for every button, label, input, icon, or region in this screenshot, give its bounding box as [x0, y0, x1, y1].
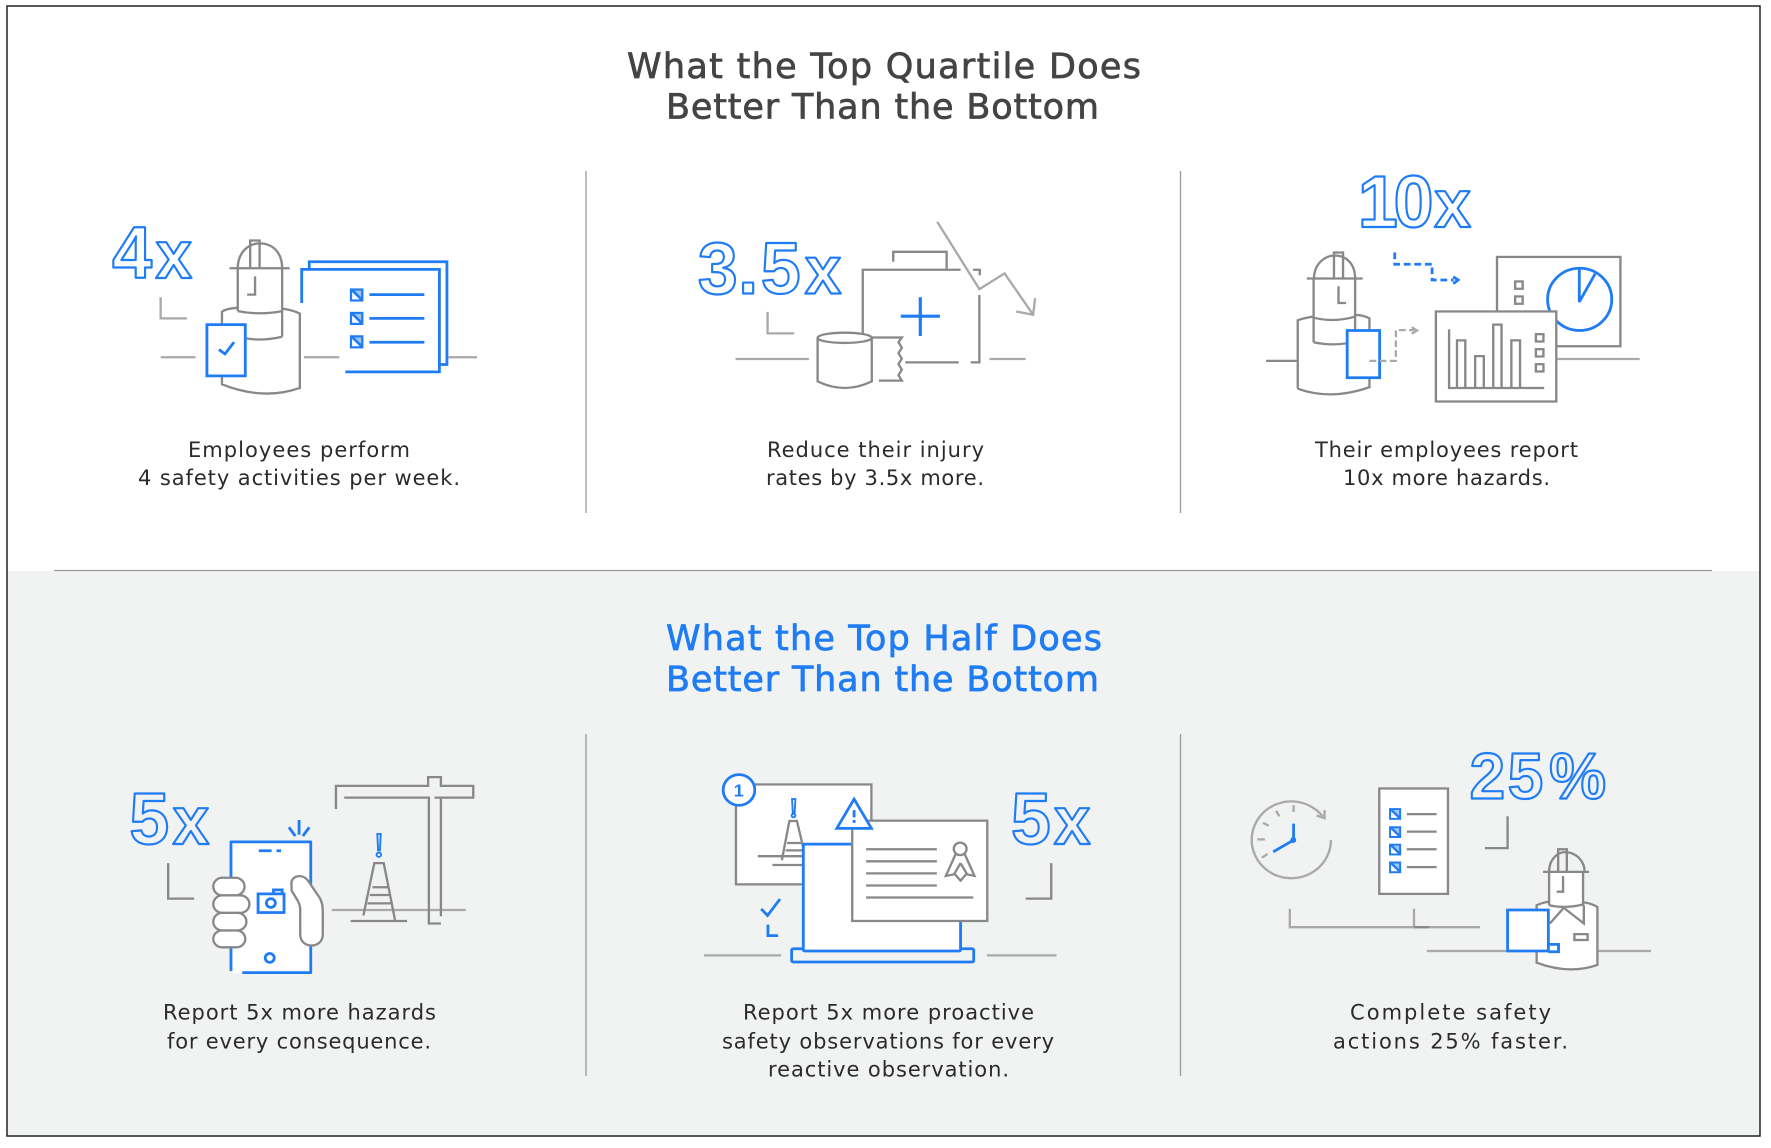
caption [1314, 438, 1578, 490]
stat: 5x: x [1054, 784, 1090, 859]
icon: clock [1252, 801, 1331, 878]
icon: traffic cone [351, 834, 407, 921]
stat: 4x: x [155, 218, 192, 293]
caption: reactive observation. [768, 1058, 1009, 1082]
illustration: laptop with certificate and hazard report [704, 775, 1090, 962]
stat: 4x: 4 [112, 213, 152, 294]
heading: top half [666, 619, 1102, 700]
panel: 4x safety activities [112, 213, 477, 490]
heading: top half: What the Top Half Does [666, 619, 1102, 659]
icon: checklist [1379, 788, 1448, 894]
icon: phone in hand [213, 820, 323, 973]
heading: top quartile: What the Top Quartile Does [627, 47, 1141, 87]
icon: check [761, 899, 780, 936]
icon: laptop [792, 844, 974, 962]
illustration: worker with checklist [112, 213, 477, 394]
stat: 5x: 5 [129, 779, 169, 860]
illustration: clock, checklist and worker [1252, 740, 1651, 969]
caption [766, 438, 984, 490]
icon: pie chart screen [1497, 257, 1620, 346]
panel: 25% faster [1252, 740, 1651, 1054]
panel: 3.5x injury rates [698, 222, 1035, 490]
heading: top quartile [627, 47, 1141, 128]
icon: worker with tablet [1508, 849, 1597, 969]
caption: safety observations for every [722, 1030, 1054, 1054]
caption: rates by 3.5x more. [766, 466, 984, 490]
icon: hazard screen: 1 [734, 781, 744, 800]
caption: Employees perform [188, 438, 410, 462]
caption: 4 safety activities per week. [138, 466, 460, 490]
caption [138, 438, 460, 490]
illustration: first aid kit and falling trend [698, 222, 1035, 388]
stat: 25%: 25% [1470, 740, 1606, 813]
icon: crane [336, 777, 473, 924]
panel: 5x proactive observations [704, 775, 1090, 1082]
icon: warning triangle [837, 799, 871, 828]
stat: 5x: x [173, 784, 209, 859]
stat: 10x: x [1434, 167, 1471, 242]
icon: bar chart screen [1436, 311, 1556, 402]
panel: 5x hazards per consequence [129, 777, 473, 1054]
caption: Report 5x more hazards [163, 1000, 436, 1024]
stat: 3.5x: x [805, 234, 841, 309]
illustration: phone photographing a hazard [129, 777, 473, 973]
panel: 10x hazards [1266, 161, 1640, 490]
stat: 5x: 5 [1011, 779, 1051, 860]
caption [163, 1000, 436, 1054]
stat: 10x: 10 [1358, 161, 1434, 243]
illustration: worker reporting to dashboards [1266, 161, 1640, 402]
icon: clipboard [207, 325, 245, 376]
icon: certificate [852, 821, 987, 921]
caption: 10x more hazards. [1343, 466, 1550, 490]
icon: hazard screen [723, 775, 871, 884]
caption: Reduce their injury [767, 438, 984, 462]
caption: actions 25% faster. [1333, 1030, 1568, 1054]
caption: for every consequence. [167, 1030, 431, 1054]
stat: 3.5x: 3.5 [698, 229, 801, 310]
caption [722, 1000, 1054, 1082]
caption: Report 5x more proactive [743, 1000, 1034, 1024]
caption: Their employees report [1314, 438, 1578, 462]
heading: top quartile: Better Than the Bottom [666, 88, 1099, 128]
caption [1333, 1000, 1568, 1054]
heading: top half: Better Than the Bottom [666, 660, 1099, 700]
caption: Complete safety [1350, 1000, 1551, 1024]
icon: checklist documents [302, 262, 447, 372]
